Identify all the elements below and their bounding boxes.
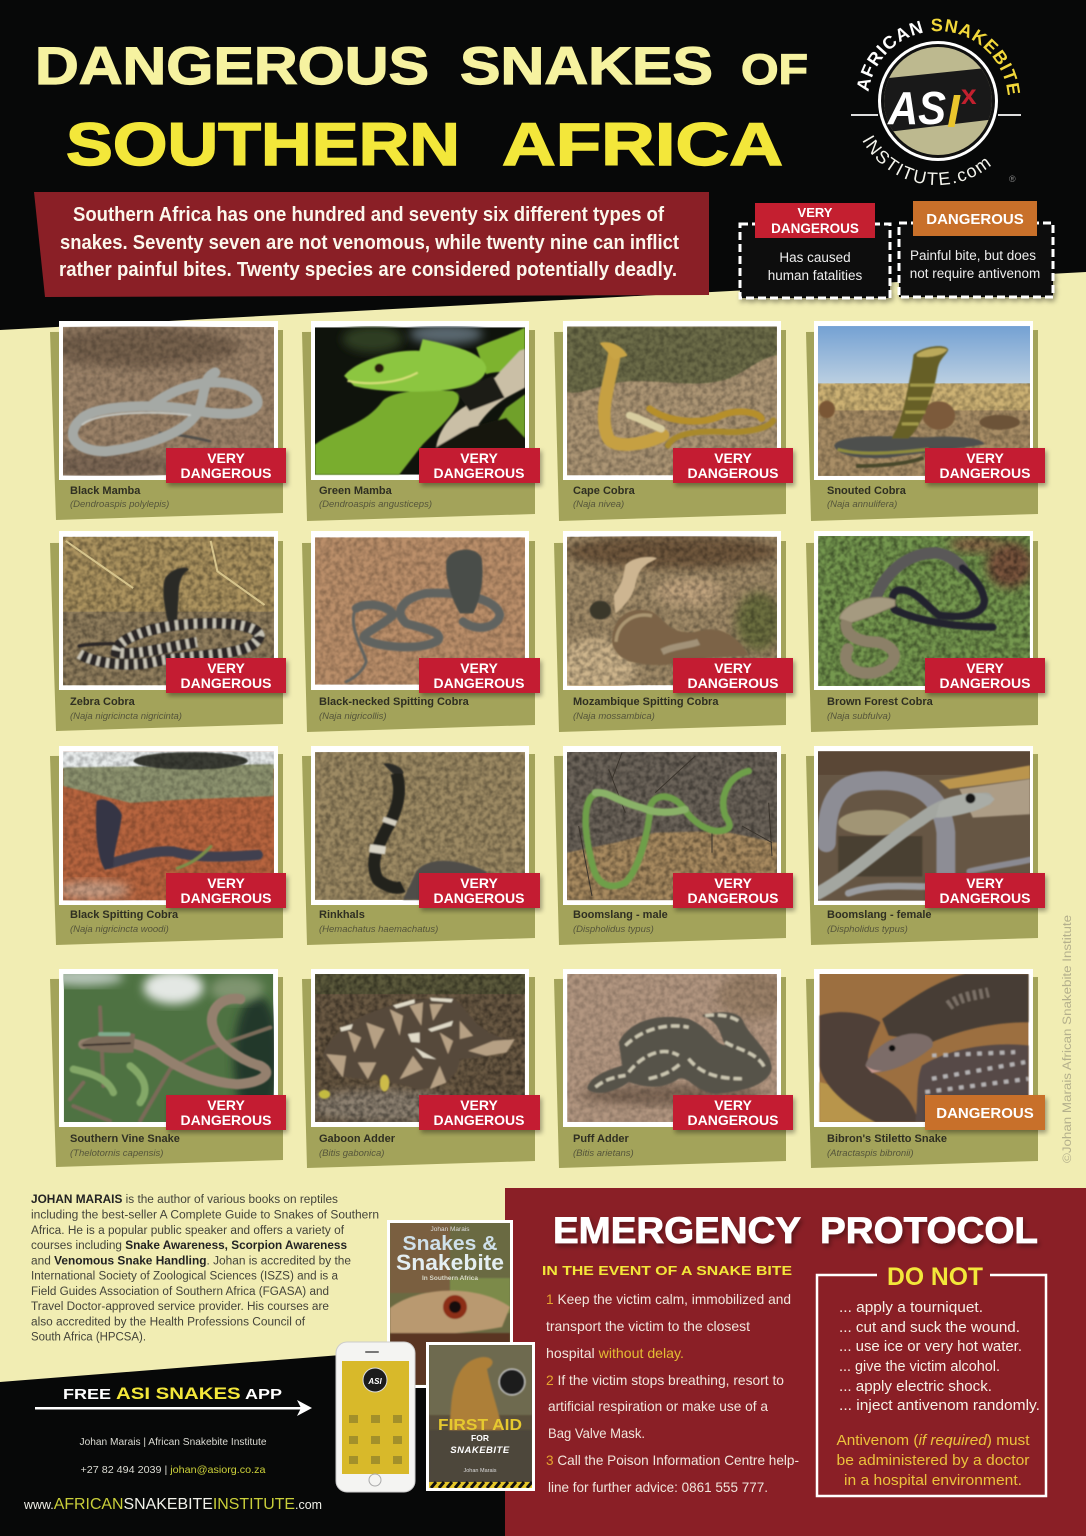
badge xyxy=(925,873,1045,908)
book: First Aid for Snakebite: Johan Marais xyxy=(463,1468,497,1474)
badge xyxy=(166,448,286,483)
name: Zebra Cobra xyxy=(70,696,136,708)
scientific name: (Thelotornis capensis) xyxy=(70,1148,163,1159)
do not list xyxy=(839,1299,1040,1414)
badge: DANGEROUS xyxy=(939,465,1031,481)
badge: VERY xyxy=(966,450,1004,466)
badge xyxy=(673,1095,793,1130)
book: First Aid for Snakebite xyxy=(426,1342,535,1491)
scientific name: (Naja subfulva) xyxy=(827,711,891,722)
badge: DANGEROUS xyxy=(433,675,525,691)
title: OF xyxy=(741,46,808,94)
legend: dangerous xyxy=(899,201,1053,297)
photo: Bibron's Stiletto Snake xyxy=(818,974,1030,1122)
app heading: FREE ASI SNAKES APP xyxy=(63,1384,282,1403)
badge: VERY xyxy=(207,660,245,676)
photo: Zebra Cobra xyxy=(63,536,274,686)
scientific name: (Dispholidus typus) xyxy=(827,924,908,935)
author bio: also accredited by the Health Professions Council of xyxy=(31,1316,306,1328)
name: Mozambique Spitting Cobra xyxy=(573,696,719,708)
intro panel: Southern Africa has one hundred and seventy six different types of xyxy=(73,204,664,226)
do not heading: DO NOT xyxy=(887,1263,983,1291)
name: Gaboon Adder xyxy=(319,1133,396,1145)
steps: 1 Keep the victim calm, immobilized and xyxy=(546,1291,791,1307)
badge xyxy=(166,1095,286,1130)
badge xyxy=(925,658,1045,693)
steps xyxy=(546,1291,799,1495)
name: Cape Cobra xyxy=(573,485,636,497)
do not list: ... inject antivenom randomly. xyxy=(839,1397,1040,1414)
photo: Black Spitting Cobra xyxy=(63,751,274,901)
badge: VERY xyxy=(460,450,498,466)
photo: Cape Cobra xyxy=(567,326,777,476)
badge: VERY xyxy=(460,1097,498,1113)
card: Green Mamba xyxy=(302,321,540,521)
card: Black Spitting Cobra xyxy=(50,746,286,945)
scientific name: (Naja mossambica) xyxy=(573,711,655,722)
card: Snouted Cobra xyxy=(806,321,1045,521)
book: Snakes & Snakebite: Snakes & xyxy=(402,1233,498,1255)
badge: DANGEROUS xyxy=(433,890,525,906)
book: Snakes & Snakebite: Johan Marais xyxy=(430,1226,470,1233)
name: Green Mamba xyxy=(319,485,393,497)
badge: VERY xyxy=(714,875,752,891)
badge: VERY xyxy=(207,875,245,891)
badge xyxy=(673,873,793,908)
author bio: courses including Snake Awareness, Scorpion Awareness xyxy=(31,1240,347,1252)
logo: African Snakebite Institute: ® xyxy=(1009,174,1016,184)
photo: Black Mamba xyxy=(63,326,274,476)
badge: DANGEROUS xyxy=(687,1112,779,1128)
intro panel: rather painful bites. Twenty species are considered potentially deadly. xyxy=(59,259,677,281)
badge: DANGEROUS xyxy=(180,1112,272,1128)
scientific name: (Dendroaspis polylepis) xyxy=(70,499,169,510)
title: SOUTHERN xyxy=(66,111,460,178)
author bio: and Venomous Snake Handling . Johan is accredited by the xyxy=(31,1256,351,1268)
book: Snakes & Snakebite: In Southern Africa xyxy=(422,1275,478,1282)
antivenom note: Antivenom (if required) must xyxy=(836,1432,1030,1449)
badge: DANGEROUS xyxy=(936,1105,1034,1122)
badge xyxy=(419,873,540,908)
do not list: ... cut and suck the wound. xyxy=(839,1319,1020,1336)
legend: very dangerous: DANGEROUS xyxy=(771,221,859,236)
card: Gaboon Adder xyxy=(302,969,540,1168)
card: Black Mamba xyxy=(39,321,286,520)
name: Rinkhals xyxy=(319,909,365,921)
card: Puff Adder xyxy=(554,969,793,1168)
author bio xyxy=(31,1194,379,1344)
book: Snakes & Snakebite: Snakebite xyxy=(396,1250,504,1275)
card: Bibron's Stiletto Snake xyxy=(806,969,1045,1168)
scientific name: (Bitis arietans) xyxy=(573,1148,634,1159)
name: Black Mamba xyxy=(70,485,141,497)
badge xyxy=(166,658,286,693)
contact details: Johan Marais | African Snakebite Institute xyxy=(80,1436,267,1448)
badge: DANGEROUS xyxy=(180,890,272,906)
badge: DANGEROUS xyxy=(433,465,525,481)
scientific name: (Dendroaspis angusticeps) xyxy=(319,499,432,510)
name: Brown Forest Cobra xyxy=(827,696,934,708)
legend: very dangerous xyxy=(740,203,890,298)
badge: VERY xyxy=(460,875,498,891)
card: Southern Vine Snake xyxy=(43,969,286,1167)
author bio: Field Guides Association of Southern Africa (FGASA) and xyxy=(31,1286,329,1298)
badge: VERY xyxy=(966,660,1004,676)
author bio: International Society of Zoological Sciences (ISZS) and is a xyxy=(31,1270,339,1282)
steps: transport the victim to the closest xyxy=(546,1318,750,1334)
emergency heading xyxy=(553,1210,1038,1251)
badge xyxy=(673,448,793,483)
name: Puff Adder xyxy=(573,1133,630,1145)
badge: DANGEROUS xyxy=(180,675,272,691)
badge: VERY xyxy=(207,450,245,466)
badge: DANGEROUS xyxy=(687,465,779,481)
legend: dangerous: Painful bite, but does xyxy=(910,248,1036,263)
title: AFRICA xyxy=(502,111,783,178)
logo: African Snakebite Institute: AFRICAN SNAKEBITE xyxy=(857,18,1020,95)
card: Mozambique Spitting Cobra xyxy=(554,531,793,732)
steps: line for further advice: 0861 555 777. xyxy=(548,1479,768,1495)
copyright: ©Johan Marais African Snakebite Institute xyxy=(1062,915,1074,1163)
card: Boomslang male xyxy=(554,746,793,945)
book: First Aid for Snakebite: FOR xyxy=(471,1433,489,1443)
badge xyxy=(673,658,793,693)
antivenom note: be administered by a doctor xyxy=(836,1452,1030,1469)
name: Southern Vine Snake xyxy=(70,1133,180,1145)
name: Snouted Cobra xyxy=(827,485,907,497)
scientific name: (Naja annulifera) xyxy=(827,499,897,510)
logo: African Snakebite Institute: I xyxy=(947,85,961,137)
scientific name: (Naja nigricincta woodi) xyxy=(70,924,169,935)
do not list: ... use ice or very hot water. xyxy=(839,1338,1022,1355)
steps: hospital without delay. xyxy=(546,1345,684,1361)
title: SNAKES xyxy=(460,37,713,96)
title: DANGEROUS xyxy=(35,37,429,96)
do not list: ... apply a tourniquet. xyxy=(839,1299,983,1316)
phone mockup: ASI Snakes app xyxy=(336,1342,415,1492)
badge: VERY xyxy=(207,1097,245,1113)
badge xyxy=(419,1095,540,1130)
intro panel: snakes. Seventy seven are not venomous, while twenty nine can inflict xyxy=(60,232,679,254)
book: First Aid for Snakebite: SNAKEBITE xyxy=(450,1445,510,1456)
title xyxy=(35,37,808,178)
badge: VERY xyxy=(460,660,498,676)
scientific name: (Dispholidus typus) xyxy=(573,924,654,935)
badge: VERY xyxy=(714,1097,752,1113)
photo: Snouted Cobra xyxy=(818,326,1030,476)
author bio: JOHAN MARAIS is the author of various books on reptiles xyxy=(31,1194,338,1206)
photo: Green Mamba xyxy=(315,326,525,476)
photo: Brown Forest Cobra xyxy=(818,536,1030,686)
logo: African Snakebite Institute: AS xyxy=(887,82,946,134)
legend: very dangerous: human fatalities xyxy=(768,268,863,283)
photo: Mozambique Spitting Cobra xyxy=(567,536,777,686)
card: Brown Forest Cobra xyxy=(806,531,1045,732)
logo: African Snakebite Institute xyxy=(851,18,1021,186)
book: First Aid for Snakebite: FIRST AID xyxy=(438,1417,522,1434)
badge: VERY xyxy=(966,875,1004,891)
steps: Bag Valve Mask. xyxy=(548,1425,645,1441)
photo: Boomslang female xyxy=(818,751,1030,901)
black header band xyxy=(0,0,1086,330)
website: www.AFRICANSNAKEBITEINSTITUTE.com xyxy=(23,1496,322,1513)
badge: DANGEROUS xyxy=(687,890,779,906)
name: Black-necked Spitting Cobra xyxy=(319,696,470,708)
photo: Boomslang male xyxy=(567,752,777,901)
phone mockup: ASI Snakes app: ASI xyxy=(367,1377,382,1386)
badge xyxy=(925,1095,1045,1130)
scientific name: (Naja nivea) xyxy=(573,499,624,510)
badge: DANGEROUS xyxy=(687,675,779,691)
photo: Puff Adder xyxy=(567,974,777,1122)
legend: very dangerous: Has caused xyxy=(779,250,851,265)
author bio: Africa. He is a popular public speaker and offers a variety of xyxy=(31,1225,345,1237)
name: Boomslang - female xyxy=(827,909,932,921)
legend: very dangerous: VERY xyxy=(798,205,833,220)
badge: DANGEROUS xyxy=(939,890,1031,906)
photo: Black-necked Spitting Cobra xyxy=(315,537,525,685)
badge: DANGEROUS xyxy=(180,465,272,481)
name: Black Spitting Cobra xyxy=(70,909,179,921)
emergency panel background xyxy=(505,1188,1086,1536)
badge: VERY xyxy=(714,450,752,466)
card: Cape Cobra xyxy=(554,321,793,521)
contact details: +27 82 494 2039 | johan@asiorg.co.za xyxy=(80,1464,266,1476)
card: Black-necked Spitting Cobra xyxy=(302,531,540,732)
scientific name: (Bitis gabonica) xyxy=(319,1148,384,1159)
name: Bibron's Stiletto Snake xyxy=(827,1133,947,1145)
antivenom note: in a hospital environment. xyxy=(844,1472,1022,1489)
legend: dangerous: not require antivenom xyxy=(910,266,1040,281)
scientific name: (Naja nigricincta nigricinta) xyxy=(70,711,182,722)
badge: DANGEROUS xyxy=(939,675,1031,691)
logo: African Snakebite Institute: INSTITUTE.com xyxy=(862,135,991,186)
badge xyxy=(419,658,540,693)
emergency heading: EMERGENCY xyxy=(553,1210,801,1251)
badge xyxy=(166,873,286,908)
card: Boomslang female xyxy=(806,746,1045,945)
scientific name: (Atractaspis bibronii) xyxy=(827,1148,914,1159)
badge xyxy=(419,448,540,483)
badge xyxy=(925,448,1045,483)
contact details xyxy=(80,1436,267,1476)
event subheading: IN THE EVENT OF A SNAKE BITE xyxy=(542,1263,792,1278)
book: Snakes & Snakebite xyxy=(387,1220,513,1388)
scientific name: (Hemachatus haemachatus) xyxy=(319,924,438,935)
photo: Southern Vine Snake xyxy=(63,974,274,1122)
author bio: Travel Doctor-approved service provider. His courses are xyxy=(31,1301,329,1313)
arrow to app xyxy=(35,1400,312,1416)
scientific name: (Naja nigricollis) xyxy=(319,711,387,722)
do not box xyxy=(817,1263,1046,1496)
do not list: ... give the victim alcohol. xyxy=(839,1358,1000,1375)
badge: DANGEROUS xyxy=(433,1112,525,1128)
legend: dangerous: DANGEROUS xyxy=(926,211,1024,228)
card: Rinkhals xyxy=(302,746,540,945)
photo: Gaboon Adder xyxy=(315,974,525,1122)
steps: 3 Call the Poison Information Centre help- xyxy=(546,1452,799,1468)
card: Zebra Cobra xyxy=(50,531,286,731)
logo: African Snakebite Institute: x xyxy=(961,79,977,110)
intro panel xyxy=(34,192,709,297)
photo: Rinkhals xyxy=(315,752,525,901)
author bio: South Africa (HPCSA). xyxy=(31,1332,146,1344)
emergency heading: PROTOCOL xyxy=(820,1210,1038,1251)
steps: 2 If the victim stops breathing, resort to xyxy=(546,1372,784,1388)
name: Boomslang - male xyxy=(573,909,668,921)
do not list: ... apply electric shock. xyxy=(839,1378,992,1395)
steps: artificial respiration or make use of a xyxy=(548,1398,768,1414)
author bio: including the best-seller A Complete Guide to Snakes of Southern xyxy=(31,1210,379,1222)
badge: VERY xyxy=(714,660,752,676)
black footer band xyxy=(0,1342,505,1536)
antivenom note xyxy=(836,1432,1030,1489)
